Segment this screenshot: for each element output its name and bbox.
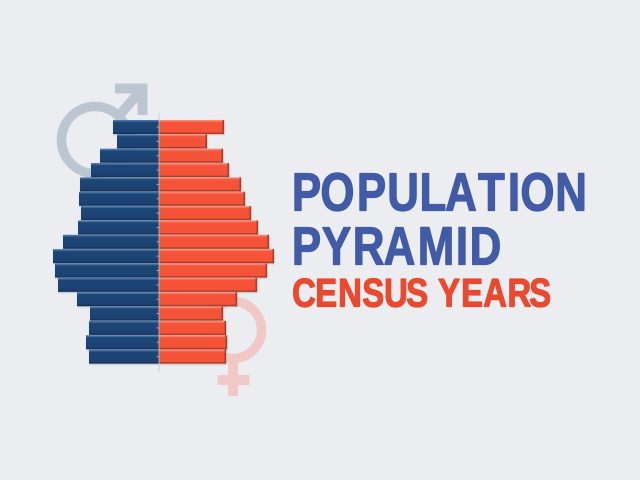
chart: female bars [160, 120, 274, 364]
chart: male bars [53, 120, 158, 364]
title: pyramid: PYRAMID [292, 217, 501, 277]
axis ticks [156, 127, 158, 357]
axis line [158, 113, 160, 372]
icon: male symbol [62, 88, 142, 174]
subtitle: census years: CENSUS YEARS [292, 270, 551, 315]
icon: female symbol [204, 302, 262, 396]
bar end bevels [206, 120, 274, 364]
title: population: POPULATION [292, 163, 587, 223]
